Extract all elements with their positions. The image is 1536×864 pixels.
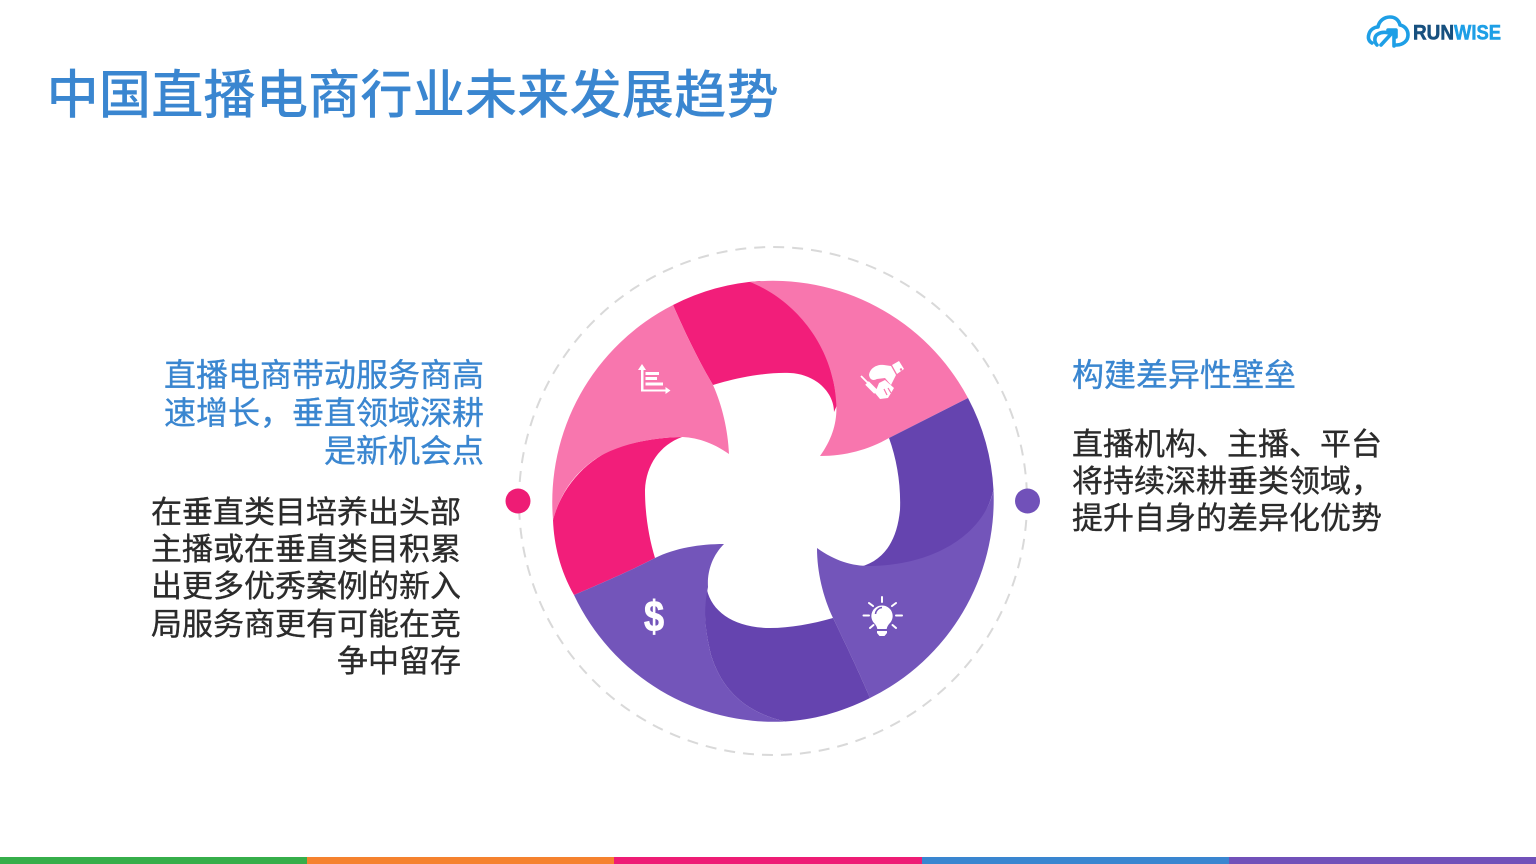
left body text: 争中留存 [337, 644, 461, 679]
right body text: 将持续深耕垂类领域， [1072, 464, 1382, 499]
right heading: 构建差异性壁垒 [1072, 357, 1296, 393]
left heading [164, 357, 484, 469]
logo: Runwise: RUN [1413, 22, 1454, 44]
logo: Runwise [1366, 15, 1501, 48]
segment: top dark pink [673, 281, 837, 412]
bottom colour stripe [0, 857, 1536, 864]
segment: bottom dark purple [705, 590, 870, 722]
left body text: 局服务商更有可能在竞 [151, 607, 461, 642]
segment: bottom right light purple [817, 490, 994, 698]
left body text: 主播或在垂直类目积累 [151, 532, 461, 567]
logo: Runwise: WISE [1454, 22, 1501, 44]
icon: handshake [861, 361, 904, 399]
pinwheel diagram [506, 246, 1040, 756]
right body text: 提升自身的差异化优势 [1072, 501, 1382, 536]
left body text [151, 495, 461, 679]
dashed outer ring [519, 247, 1027, 755]
right body text: 直播机构、主播、平台 [1072, 427, 1382, 462]
left body text: 出更多优秀案例的新入 [151, 569, 461, 604]
icon: dollar sign: $ [644, 592, 664, 641]
left heading: 是新机会点 [324, 433, 484, 469]
left heading: 直播电商带动服务商高 [164, 357, 484, 393]
segment: left dark pink [553, 437, 682, 595]
segment: top right light pink [750, 281, 968, 456]
segment: bottom left light purple [574, 544, 785, 722]
icon: light bulb [864, 597, 902, 636]
left heading: 速增长，垂直领域深耕 [164, 395, 484, 431]
icon: bar chart [638, 364, 670, 394]
left body text: 在垂直类目培养出头部 [151, 495, 461, 530]
segment: right dark purple [860, 398, 994, 567]
title: 中国直播电商行业未来发展趋势 [46, 67, 779, 125]
segment: left light pink [552, 305, 729, 520]
left connector dot [506, 488, 530, 514]
right body text [1072, 427, 1382, 536]
right connector dot [1015, 488, 1040, 514]
